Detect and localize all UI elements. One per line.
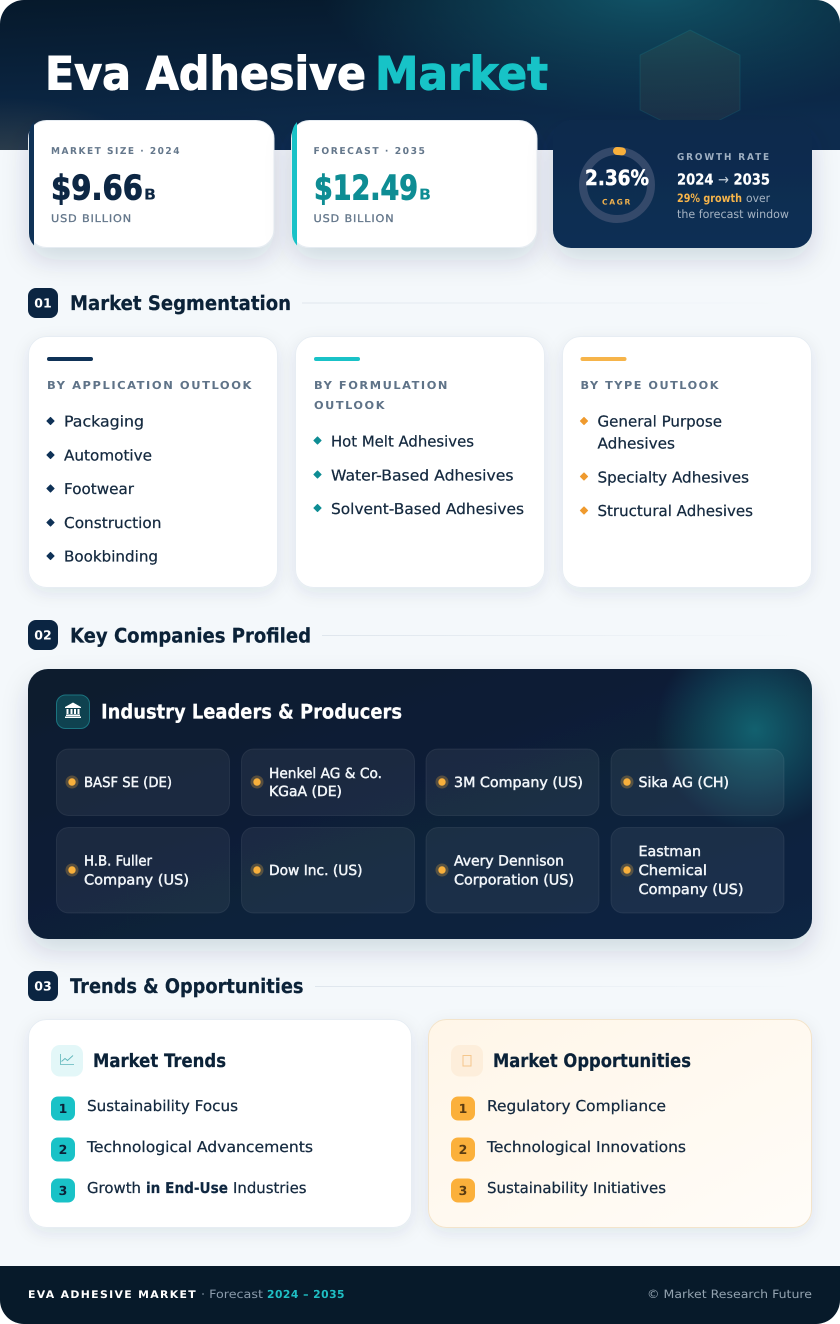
company: Dow — [242, 828, 414, 913]
stat card: growth rate: 29% growth — [677, 191, 742, 205]
stat card: market size 2024: B — [144, 186, 156, 204]
trend 2: Technological Advancements — [86, 1138, 313, 1156]
panel: key companies — [28, 669, 812, 939]
opportunity 1: 1 — [459, 1101, 467, 1116]
panel: by type outlook: BY TYPE OUTLOOK — [580, 379, 720, 392]
icon: opportunity placeholder — [451, 1045, 483, 1076]
opportunity 2: Technological Innovations — [486, 1138, 686, 1156]
footer: EVA ADHESIVE MARKET — [28, 1289, 197, 1301]
section heading 01: Market Segmentation — [70, 291, 291, 315]
panel: by application outlook: BY APPLICATION OUTLOOK — [47, 379, 253, 392]
company: BASF SE: BASF SE (DE) — [84, 775, 172, 791]
company: Eastman — [611, 828, 784, 913]
opportunity 2 — [451, 1138, 686, 1162]
stat card: forecast 2035 — [292, 120, 537, 248]
title — [48, 54, 548, 91]
section heading 01 — [28, 288, 608, 318]
section heading 02: Key Companies Profiled — [70, 624, 311, 648]
company: Sika — [611, 749, 784, 816]
title: Market — [375, 46, 548, 100]
company: Henkel: KGaA (DE) — [269, 784, 342, 800]
section heading 03: Trends & Opportunities — [70, 974, 304, 998]
stat card: growth rate: GROWTH RATE — [677, 152, 771, 163]
opportunity 3: Sustainability Initiatives — [487, 1179, 666, 1197]
panel: by application outlook: Construction — [64, 514, 162, 532]
panel: by type outlook: Structural Adhesives — [598, 502, 753, 520]
stat card: market size 2024: $9.66 — [51, 168, 143, 208]
stat card: market size 2024 — [28, 120, 274, 248]
opportunity 3 — [451, 1178, 666, 1202]
company: H.B. Fuller — [56, 828, 230, 913]
company: Henkel — [242, 749, 414, 816]
panel: market opportunities: Market Opportunities — [493, 1051, 691, 1072]
section heading 02: 02 — [34, 628, 52, 642]
company: BASF SE — [56, 749, 230, 816]
panel: by formulation outlook: Water-Based Adhesives — [331, 466, 514, 484]
company: 3M — [426, 749, 599, 816]
stat card: growth rate: 2024 → 2035 — [677, 170, 770, 188]
trend 3: 3 — [59, 1183, 67, 1198]
footer: · Forecast — [201, 1287, 264, 1301]
stat card: forecast 2035: USD BILLION — [314, 213, 394, 225]
company: Eastman: Company (US) — [638, 882, 744, 898]
header band — [0, 0, 840, 150]
panel heading: Industry Leaders & Producers — [101, 700, 402, 724]
panel: by application outlook: Bookbinding — [64, 548, 158, 566]
trend 1: 1 — [59, 1101, 67, 1116]
stat card: market size 2024: MARKET SIZE · 2024 — [51, 146, 181, 157]
icon: line chart — [51, 1045, 83, 1076]
trend 3 — [51, 1178, 307, 1202]
trend 1: Sustainability Focus — [87, 1097, 238, 1115]
panel: market opportunities — [428, 1020, 812, 1228]
panel: by application outlook: Packaging — [64, 412, 144, 430]
chart: CAGR ring — [583, 151, 651, 219]
chart: CAGR ring: CAGR — [602, 198, 632, 206]
panel: by application outlook: Footwear — [64, 480, 135, 498]
company: Eastman: Chemical — [638, 863, 707, 879]
icon: hexagon decoration — [640, 30, 740, 120]
panel: by type outlook — [562, 336, 812, 588]
section heading 02 — [28, 620, 616, 650]
footer: 2024 – 2035 — [267, 1288, 345, 1301]
opportunity 1 — [451, 1096, 666, 1120]
opportunity 2: 2 — [459, 1142, 467, 1157]
opportunity 1: Regulatory Compliance — [487, 1097, 666, 1115]
company: 3M: 3M Company (US) — [454, 775, 583, 791]
panel: by formulation outlook: OUTLOOK — [314, 399, 386, 412]
opportunity 3: 3 — [459, 1183, 467, 1198]
title: Eva Adhesive — [45, 46, 366, 100]
company: Avery Dennison: Avery Dennison — [454, 854, 564, 870]
stat card: growth rate: the forecast window — [677, 207, 789, 221]
trend 3: Industries — [233, 1179, 307, 1197]
trend 3: in End-Use — [146, 1179, 228, 1197]
panel: by formulation outlook: BY FORMULATION — [314, 379, 449, 392]
trend 2 — [51, 1138, 313, 1162]
company: Avery Dennison — [426, 828, 599, 913]
panel: market trends — [28, 1020, 412, 1228]
trend 1 — [51, 1096, 238, 1120]
chart: CAGR ring: 2.36% — [585, 166, 649, 190]
panel: by type outlook: Adhesives — [598, 434, 675, 452]
panel: by formulation outlook — [296, 336, 544, 588]
panel: by application outlook: Automotive — [64, 446, 152, 464]
panel: market trends: Market Trends — [93, 1051, 226, 1072]
panel: by type outlook: General Purpose — [598, 412, 722, 430]
icon: institution — [56, 695, 90, 728]
panel: by application outlook — [28, 336, 278, 588]
trend 3: Growth — [87, 1179, 141, 1197]
stat card: growth rate — [553, 120, 812, 248]
footer: © Market Research Future — [647, 1287, 812, 1301]
section heading 03 — [28, 971, 614, 1001]
stat card: market size 2024: USD BILLION — [51, 213, 132, 225]
trend 2: 2 — [59, 1142, 67, 1157]
company: H.B. Fuller: H.B. Fuller — [84, 854, 152, 870]
panel: by type outlook: Specialty Adhesives — [598, 468, 749, 486]
company: Avery Dennison: Corporation (US) — [454, 872, 574, 888]
stat card: growth rate: over — [746, 191, 770, 205]
stat card: forecast 2035: B — [419, 186, 431, 204]
stat card: forecast 2035: $12.49 — [314, 168, 418, 208]
company: Henkel: Henkel AG & Co. — [269, 766, 382, 782]
company: Sika: Sika AG (CH) — [638, 775, 729, 791]
section heading 03: 03 — [34, 978, 52, 994]
footer — [0, 1266, 840, 1324]
stat card: forecast 2035: FORECAST · 2035 — [314, 146, 426, 157]
company: H.B. Fuller: Company (US) — [84, 872, 189, 888]
company: Dow: Dow Inc. (US) — [269, 863, 362, 879]
panel: by formulation outlook: Solvent-Based Adhesives — [331, 500, 524, 518]
panel: by formulation outlook: Hot Melt Adhesives — [331, 432, 474, 450]
company: Eastman: Eastman — [638, 844, 701, 860]
section heading 01: 01 — [34, 296, 52, 310]
